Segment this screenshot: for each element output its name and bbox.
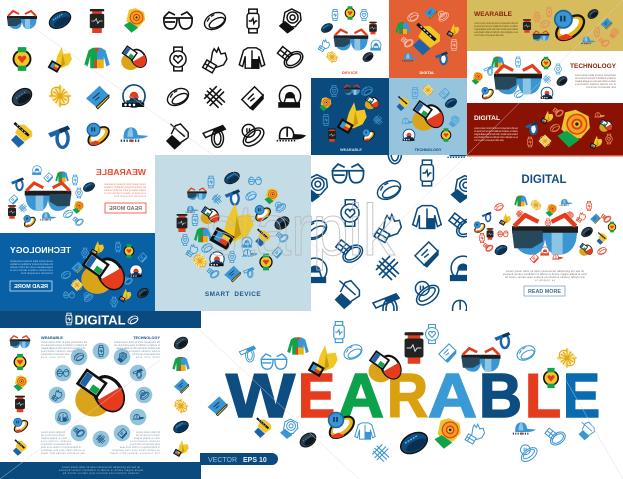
- text block mirrored: magna aliqua ut enim ad minim veniam: [104, 189, 146, 192]
- text block top right: commodo consequat duis: [132, 353, 161, 356]
- text block mirrored: do eiusmod tempor incididunt ut labore: [103, 186, 146, 189]
- heading: TECHNOLOGY: [570, 63, 617, 70]
- footer bar: ad minim veniam quis nostrud exercitation ullamco: [63, 472, 140, 475]
- text block: commodo consequat duis aute: [474, 34, 505, 37]
- text block bottom right: [110, 431, 161, 455]
- text block top left: commodo consequat duis: [41, 353, 70, 356]
- text block: magna aliqua ut enim ad minim veniam quis nostrud: [474, 28, 519, 31]
- central cuff icon: [75, 370, 129, 416]
- text block top right: aute irure dolor: [136, 356, 160, 359]
- text block: [474, 127, 519, 142]
- text block mirrored: [103, 183, 146, 198]
- text block bottom left: do eiusmod tempor: [41, 434, 65, 437]
- heading: WEARABLE: [474, 11, 513, 18]
- heading mirrored: TECHNOLOGY: [9, 246, 71, 255]
- footer bar: Lorem ipsum dolor sit amet consectetur adipiscing elit sed do: [62, 466, 141, 469]
- panel: wearable navy square: [311, 78, 389, 155]
- panel: digital white square: [467, 155, 623, 296]
- left icon column: [10, 336, 30, 456]
- text block: exercitation ullamco laboris nisi ut: [575, 83, 616, 86]
- text block: Lorem ipsum dolor sit amet consectetur elit sed: [474, 127, 519, 130]
- text block: commodo consequat duis aute: [474, 139, 505, 142]
- word: WEARABLE: B: [479, 361, 522, 431]
- text block top right: exercitation ullamco laboris: [126, 350, 161, 353]
- word: WEARABLE: E: [563, 361, 600, 431]
- text block bottom left: Lorem ipsum dolor sit: [41, 431, 65, 434]
- panel: wearable navy square: WEARABLE: [340, 148, 362, 152]
- text block mirrored: Lorem ipsum dolor sit amet consectetur: [104, 183, 146, 186]
- text block: ut aliquip ex: [535, 279, 556, 282]
- word: WEARABLE: E: [298, 361, 335, 431]
- text block: magna aliqua ut enim ad minim veniam: [575, 80, 616, 83]
- text block mirrored: exercitation ullamco laboris nisi ut: [104, 192, 146, 195]
- read more button: READ MORE: [528, 289, 562, 295]
- panel: digital infographic: [0, 311, 201, 479]
- badge: vector eps 10: VECTOR: [208, 457, 237, 464]
- panel: mirrored wearable banner: [0, 155, 155, 233]
- text block mirrored: Lorem ipsum dolor sit amet consectetur: [10, 260, 53, 263]
- header bar: DIGITAL: [74, 312, 126, 328]
- text block top left: do eiusmod tempor incididunt ut labore et: [41, 344, 87, 347]
- panel: device square: DEVICE: [342, 71, 358, 75]
- panel: device square: [311, 0, 389, 78]
- text block mirrored: [9, 260, 53, 275]
- read more button mirrored: READ MORE: [108, 206, 142, 212]
- read more button: [524, 286, 565, 296]
- hero: wearable lettering with icons: [208, 322, 600, 464]
- text block bottom left: aute irure dolor in reprehenderit in: [41, 446, 82, 449]
- panel: smart device square: [155, 155, 311, 311]
- text block top left: [41, 341, 87, 359]
- text block bottom right: voluptate velit esse cillum dolore eu: [112, 449, 161, 452]
- text block: Lorem ipsum dolor sit amet consectetur adipiscing elit sed do: [506, 270, 585, 273]
- text block bottom right: commodo consequat duis: [130, 443, 161, 446]
- badge: vector eps 10: EPS 10: [243, 457, 267, 464]
- text block: exercitation ullamco laboris nisi ut aliquip ex ea: [474, 136, 519, 139]
- text block bottom right: aute irure dolor in reprehenderit in: [120, 446, 161, 449]
- text block: commodo consequat duis: [586, 86, 617, 89]
- text block bottom right: magna aliqua ut enim: [134, 437, 160, 440]
- text block top left: magna aliqua ut enim ad minim veniam quis: [41, 347, 86, 350]
- text block: magna aliqua ut enim ad minim veniam quis nostrud: [474, 133, 519, 136]
- heading: technology: TECHNOLOGY: [133, 336, 160, 340]
- text block mirrored: exercitation ullamco laboris nisi ut: [10, 269, 53, 272]
- panel: mirrored technology banner: [0, 233, 155, 311]
- text block mirrored: commodo consequat duis: [113, 195, 146, 198]
- text block: Lorem ipsum dolor sit amet consectetur: [575, 74, 616, 77]
- watermark: starpik: [205, 191, 396, 271]
- footer bar: eiusmod tempor incididunt ut labore et dolore magna aliqua: [59, 469, 144, 472]
- text block: do eiusmod tempor incididunt ut labore et dolore: [474, 130, 519, 133]
- text block bottom left: fugiat nulla pariatur excepteur sint: [41, 452, 85, 455]
- heading: DIGITAL: [521, 174, 567, 186]
- text block top right: do eiusmod tempor incididunt ut labore et: [114, 344, 160, 347]
- panel: technology light blue square: [389, 78, 467, 155]
- panel: digital dark red banner: [467, 103, 623, 155]
- text block: do eiusmod tempor incididunt ut labore et dolore: [474, 25, 519, 28]
- word: WEARABLE: [226, 361, 600, 431]
- text block bottom right: Lorem ipsum dolor sit: [136, 431, 160, 434]
- word: WEARABLE: A: [428, 361, 477, 431]
- text block top right: magna aliqua ut enim ad minim veniam quis: [116, 347, 161, 350]
- heading: DIGITAL: [474, 115, 500, 122]
- word: WEARABLE: A: [338, 361, 384, 431]
- text block: ad minim veniam quis nostrud exercitation ullamco laboris nisi: [505, 276, 585, 279]
- panel: black outline icon grid: [163, 9, 306, 150]
- footer bar: [0, 462, 201, 479]
- read more button mirrored: [105, 203, 146, 213]
- panel: digital orange square: [389, 0, 467, 78]
- text block: [474, 22, 519, 37]
- text block: eiusmod tempor incididunt ut labore et dolore magna aliqua ut enim: [503, 273, 587, 276]
- text block bottom right: fugiat nulla pariatur excepteur sint: [110, 452, 160, 455]
- text block mirrored: do eiusmod tempor incididunt ut labore: [9, 263, 53, 266]
- text block bottom right: do eiusmod tempor: [136, 434, 160, 437]
- panel: technology light blue square: TECHNOLOGY: [415, 148, 442, 152]
- panel: technology white banner: [467, 51, 623, 103]
- text block bottom left: commodo consequat duis: [41, 443, 72, 446]
- panel: colour icon grid: [7, 7, 149, 149]
- text block: exercitation ullamco laboris nisi ut aliquip ex ea: [474, 31, 519, 34]
- text block bottom left: [41, 431, 86, 455]
- text block bottom right: exercitation ullamco: [130, 440, 161, 443]
- text block top left: exercitation ullamco laboris: [41, 350, 76, 353]
- word: WEARABLE: L: [525, 361, 561, 431]
- text block top right: Lorem ipsum dolor sit amet consectetur elit: [114, 341, 160, 344]
- text block mirrored: commodo consequat duis: [20, 272, 53, 275]
- right icon column: [171, 334, 191, 457]
- word: WEARABLE: W: [226, 361, 295, 431]
- circle ring of icons: [49, 343, 152, 447]
- read more button mirrored: [10, 281, 52, 291]
- panel: navy outline pattern: [311, 155, 467, 311]
- heading: wearable: WEARABLE: [41, 336, 63, 340]
- text block top left: Lorem ipsum dolor sit amet consectetur elit: [41, 341, 87, 344]
- read more button mirrored: READ MORE: [13, 284, 48, 290]
- panel: wearable yellow banner: [467, 0, 623, 51]
- text block: [575, 74, 617, 89]
- text block mirrored: magna aliqua ut enim ad minim veniam: [10, 266, 53, 269]
- text block bottom left: magna aliqua ut enim: [41, 437, 67, 440]
- text block: [503, 270, 587, 282]
- text block bottom left: voluptate velit esse cillum dolore eu: [41, 449, 86, 452]
- heading mirrored: WEARABLE: [95, 168, 146, 177]
- badge: vector eps 10: [200, 453, 278, 465]
- panel: digital orange square: DIGITAL: [420, 71, 435, 75]
- text block bottom left: exercitation ullamco: [41, 440, 72, 443]
- text block top right: [114, 341, 161, 359]
- label: smart device: SMART DEVICE: [205, 291, 261, 298]
- header bar: [0, 311, 201, 328]
- text block top left: aute irure dolor: [41, 356, 65, 359]
- text block: Lorem ipsum dolor sit amet consectetur elit sed: [474, 22, 519, 25]
- text block: do eiusmod tempor incididunt ut labore: [575, 77, 617, 80]
- word: WEARABLE: R: [387, 361, 428, 431]
